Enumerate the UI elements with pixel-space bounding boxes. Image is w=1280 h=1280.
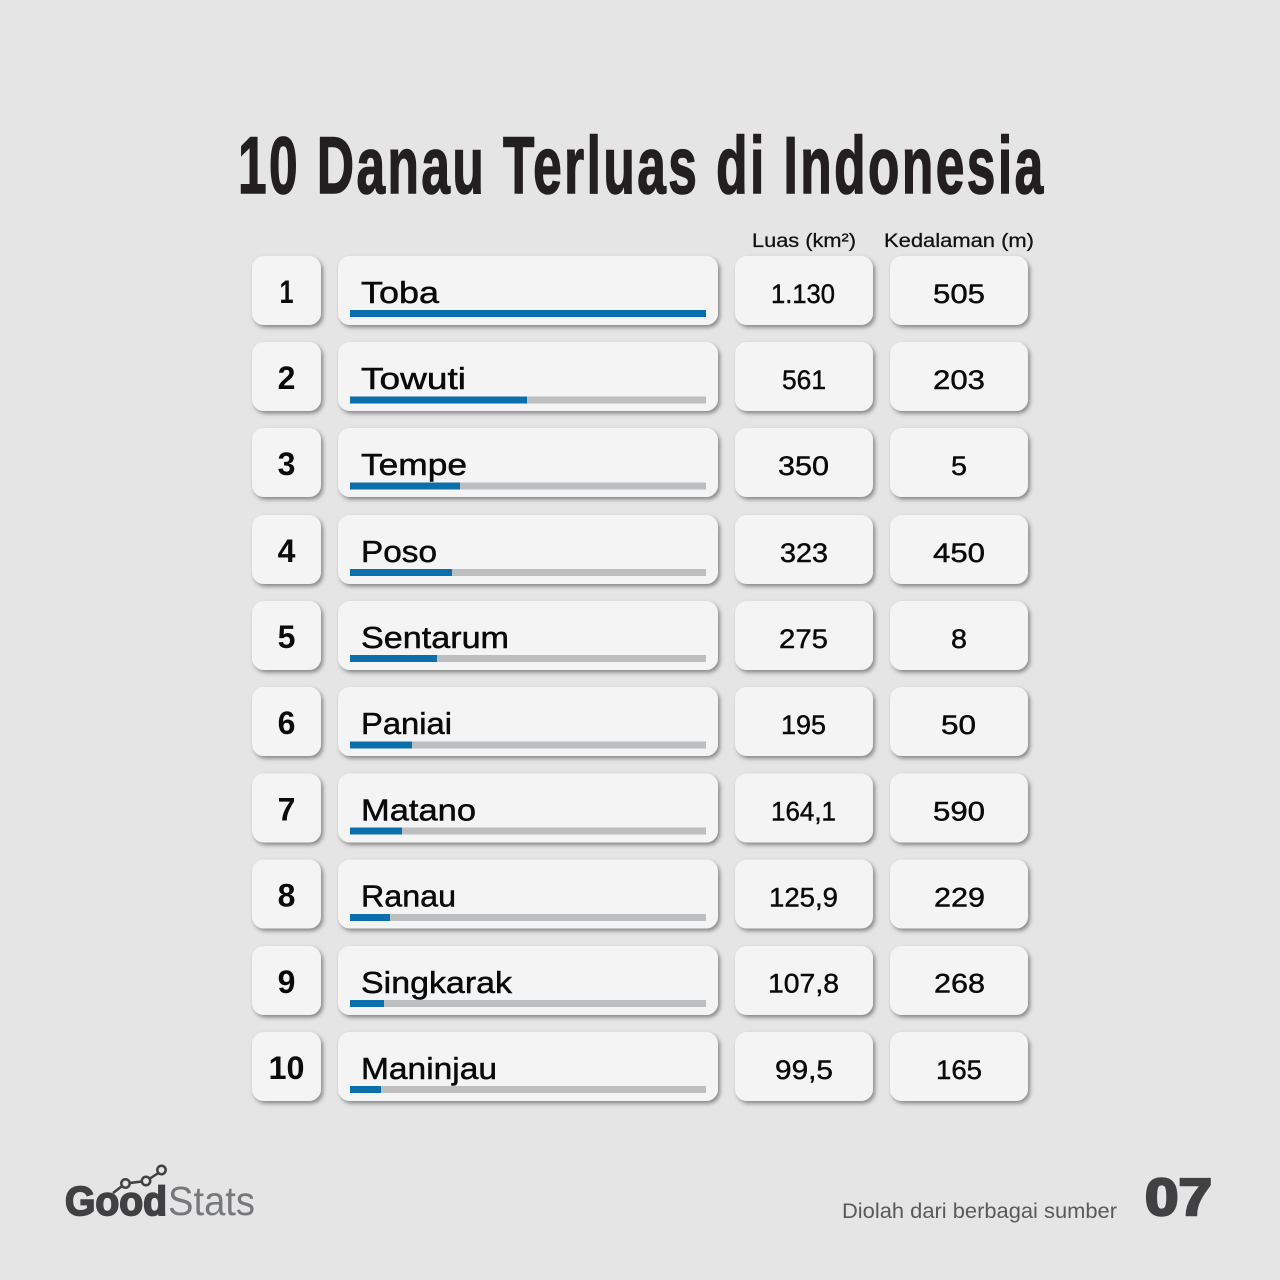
- row 1: Toba: 1.130: [771, 279, 835, 309]
- row 3: Tempe: Tempe: [361, 447, 467, 482]
- row 6: Paniai: 6: [278, 705, 295, 741]
- row 5: Sentarum: [252, 601, 1028, 670]
- row 9: Singkarak: Singkarak: [361, 965, 513, 1000]
- row 2: Towuti: 561: [782, 365, 826, 395]
- row 7: Matano: [252, 774, 1028, 842]
- row 7: Matano: 164,1: [771, 796, 836, 826]
- row 3: Tempe: 5: [951, 451, 967, 481]
- row 3: Tempe: [252, 428, 1028, 497]
- row 4: Poso: [252, 515, 1028, 584]
- title: 10 Danau Terluas di Indonesia: [238, 121, 1044, 211]
- row 8: Ranau: Ranau: [361, 878, 456, 914]
- row 7: Matano: 590: [933, 796, 985, 826]
- row 8: Ranau: 229: [934, 882, 985, 912]
- row 10: Maninjau: 165: [936, 1055, 982, 1085]
- row 10: Maninjau: [252, 1032, 1028, 1101]
- row 4: Poso: 323: [780, 538, 828, 568]
- row 6: Paniai: 50: [941, 710, 976, 740]
- page number: 07: [1145, 1169, 1212, 1227]
- row 9: Singkarak: [252, 946, 1028, 1015]
- source note: Diolah dari berbagai sumber: [842, 1200, 1117, 1223]
- row 10: Maninjau: 99,5: [775, 1055, 833, 1085]
- row 4: Poso: Poso: [361, 534, 437, 569]
- row 7: Matano: 7: [278, 792, 295, 828]
- row 6: Paniai: [252, 687, 1028, 756]
- row 10: Maninjau: Maninjau: [361, 1051, 497, 1086]
- row 4: Poso: 4: [278, 533, 296, 569]
- row 1: Toba: 505: [933, 279, 985, 309]
- row 2: Towuti: 2: [278, 360, 295, 396]
- row 7: Matano: Matano: [361, 792, 476, 828]
- logo: GoodStats: Stats: [168, 1178, 255, 1224]
- row 5: Sentarum: Sentarum: [361, 620, 509, 655]
- row 2: Towuti: 203: [933, 365, 985, 395]
- row 6: Paniai: 195: [781, 710, 826, 740]
- column heading: Kedalaman: Kedalaman (m): [884, 231, 1034, 252]
- row 5: Sentarum: 275: [779, 624, 828, 654]
- row 8: Ranau: 8: [278, 878, 295, 914]
- row 5: Sentarum: 8: [951, 624, 967, 654]
- row 4: Poso: 450: [933, 538, 985, 568]
- row 6: Paniai: Paniai: [361, 706, 452, 741]
- row 3: Tempe: 350: [778, 451, 829, 481]
- row 3: Tempe: 3: [278, 446, 295, 482]
- logo: GoodStats: [65, 1166, 255, 1224]
- row 1: Toba: Toba: [361, 275, 440, 310]
- row 2: Towuti: [252, 342, 1028, 411]
- row 9: Singkarak: 268: [934, 968, 985, 998]
- row 1: Toba: 1: [280, 274, 294, 310]
- row 9: Singkarak: 9: [278, 964, 295, 1000]
- row 8: Ranau: [252, 860, 1028, 928]
- row 5: Sentarum: 5: [278, 619, 295, 655]
- row 2: Towuti: Towuti: [361, 361, 466, 396]
- column heading: Luas: Luas (km²): [752, 231, 856, 252]
- row 9: Singkarak: 107,8: [768, 968, 839, 998]
- logo: GoodStats: Good: [65, 1178, 167, 1224]
- row 8: Ranau: 125,9: [769, 882, 838, 912]
- row 10: Maninjau: 10: [268, 1050, 304, 1086]
- row 1: Toba: [252, 256, 1028, 325]
